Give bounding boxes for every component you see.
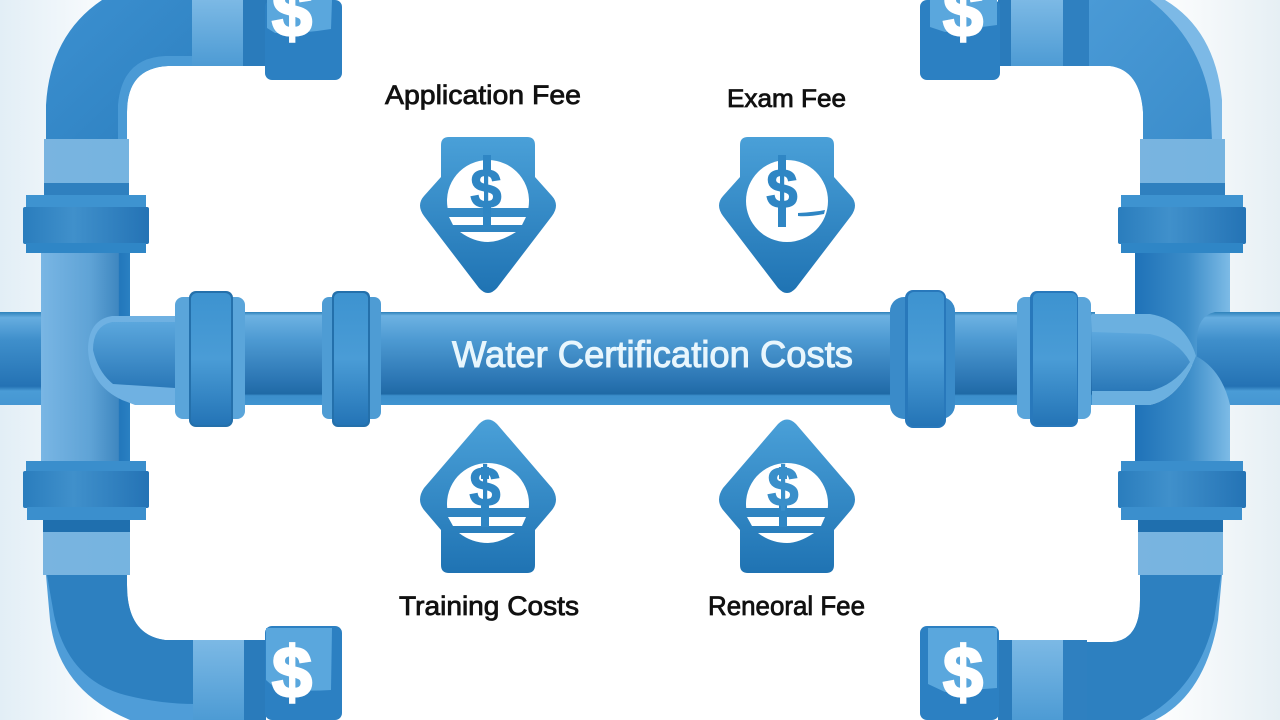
icon: exam fee: $ bbox=[766, 157, 798, 220]
label: application fee: Application Fee bbox=[385, 80, 581, 110]
icon: renewal fee bbox=[719, 420, 855, 573]
flange: main pipe 3 bbox=[890, 290, 955, 428]
pipe: right vertical riser upper bbox=[1135, 250, 1230, 365]
pipe assembly: top right bbox=[920, 0, 1246, 253]
pipe: right vertical riser lower bbox=[1135, 356, 1230, 465]
pipe: left stub bbox=[0, 312, 41, 405]
pipe assembly: top left bbox=[23, 0, 342, 253]
label: training costs: Training Costs bbox=[399, 591, 579, 621]
icon: application fee: $ bbox=[470, 157, 502, 220]
icon: renewal fee: $ bbox=[767, 455, 799, 518]
label: exam fee: Exam Fee bbox=[727, 85, 846, 113]
pipe assembly: bottom right bbox=[920, 461, 1246, 720]
flange: main pipe 1 bbox=[175, 291, 245, 427]
pipe assembly: bottom right: $ bbox=[943, 633, 983, 713]
flange: main pipe 2 bbox=[322, 291, 381, 427]
icon: application fee bbox=[420, 137, 556, 293]
pipe: main horizontal bbox=[88, 312, 1196, 405]
icon: training costs bbox=[420, 420, 556, 573]
pipe: left vertical riser bbox=[41, 250, 130, 464]
pipe assembly: bottom left: $ bbox=[272, 633, 312, 713]
pipe: right stub bbox=[1197, 312, 1280, 405]
title: Water Certification Costs bbox=[452, 334, 853, 375]
label: renewal fee: Reneoral Fee bbox=[708, 591, 865, 621]
icon: exam fee bbox=[719, 137, 855, 293]
icon: training costs: $ bbox=[469, 455, 501, 518]
flange: main pipe 4 bbox=[1017, 291, 1091, 427]
pipe assembly: bottom left bbox=[23, 461, 342, 720]
